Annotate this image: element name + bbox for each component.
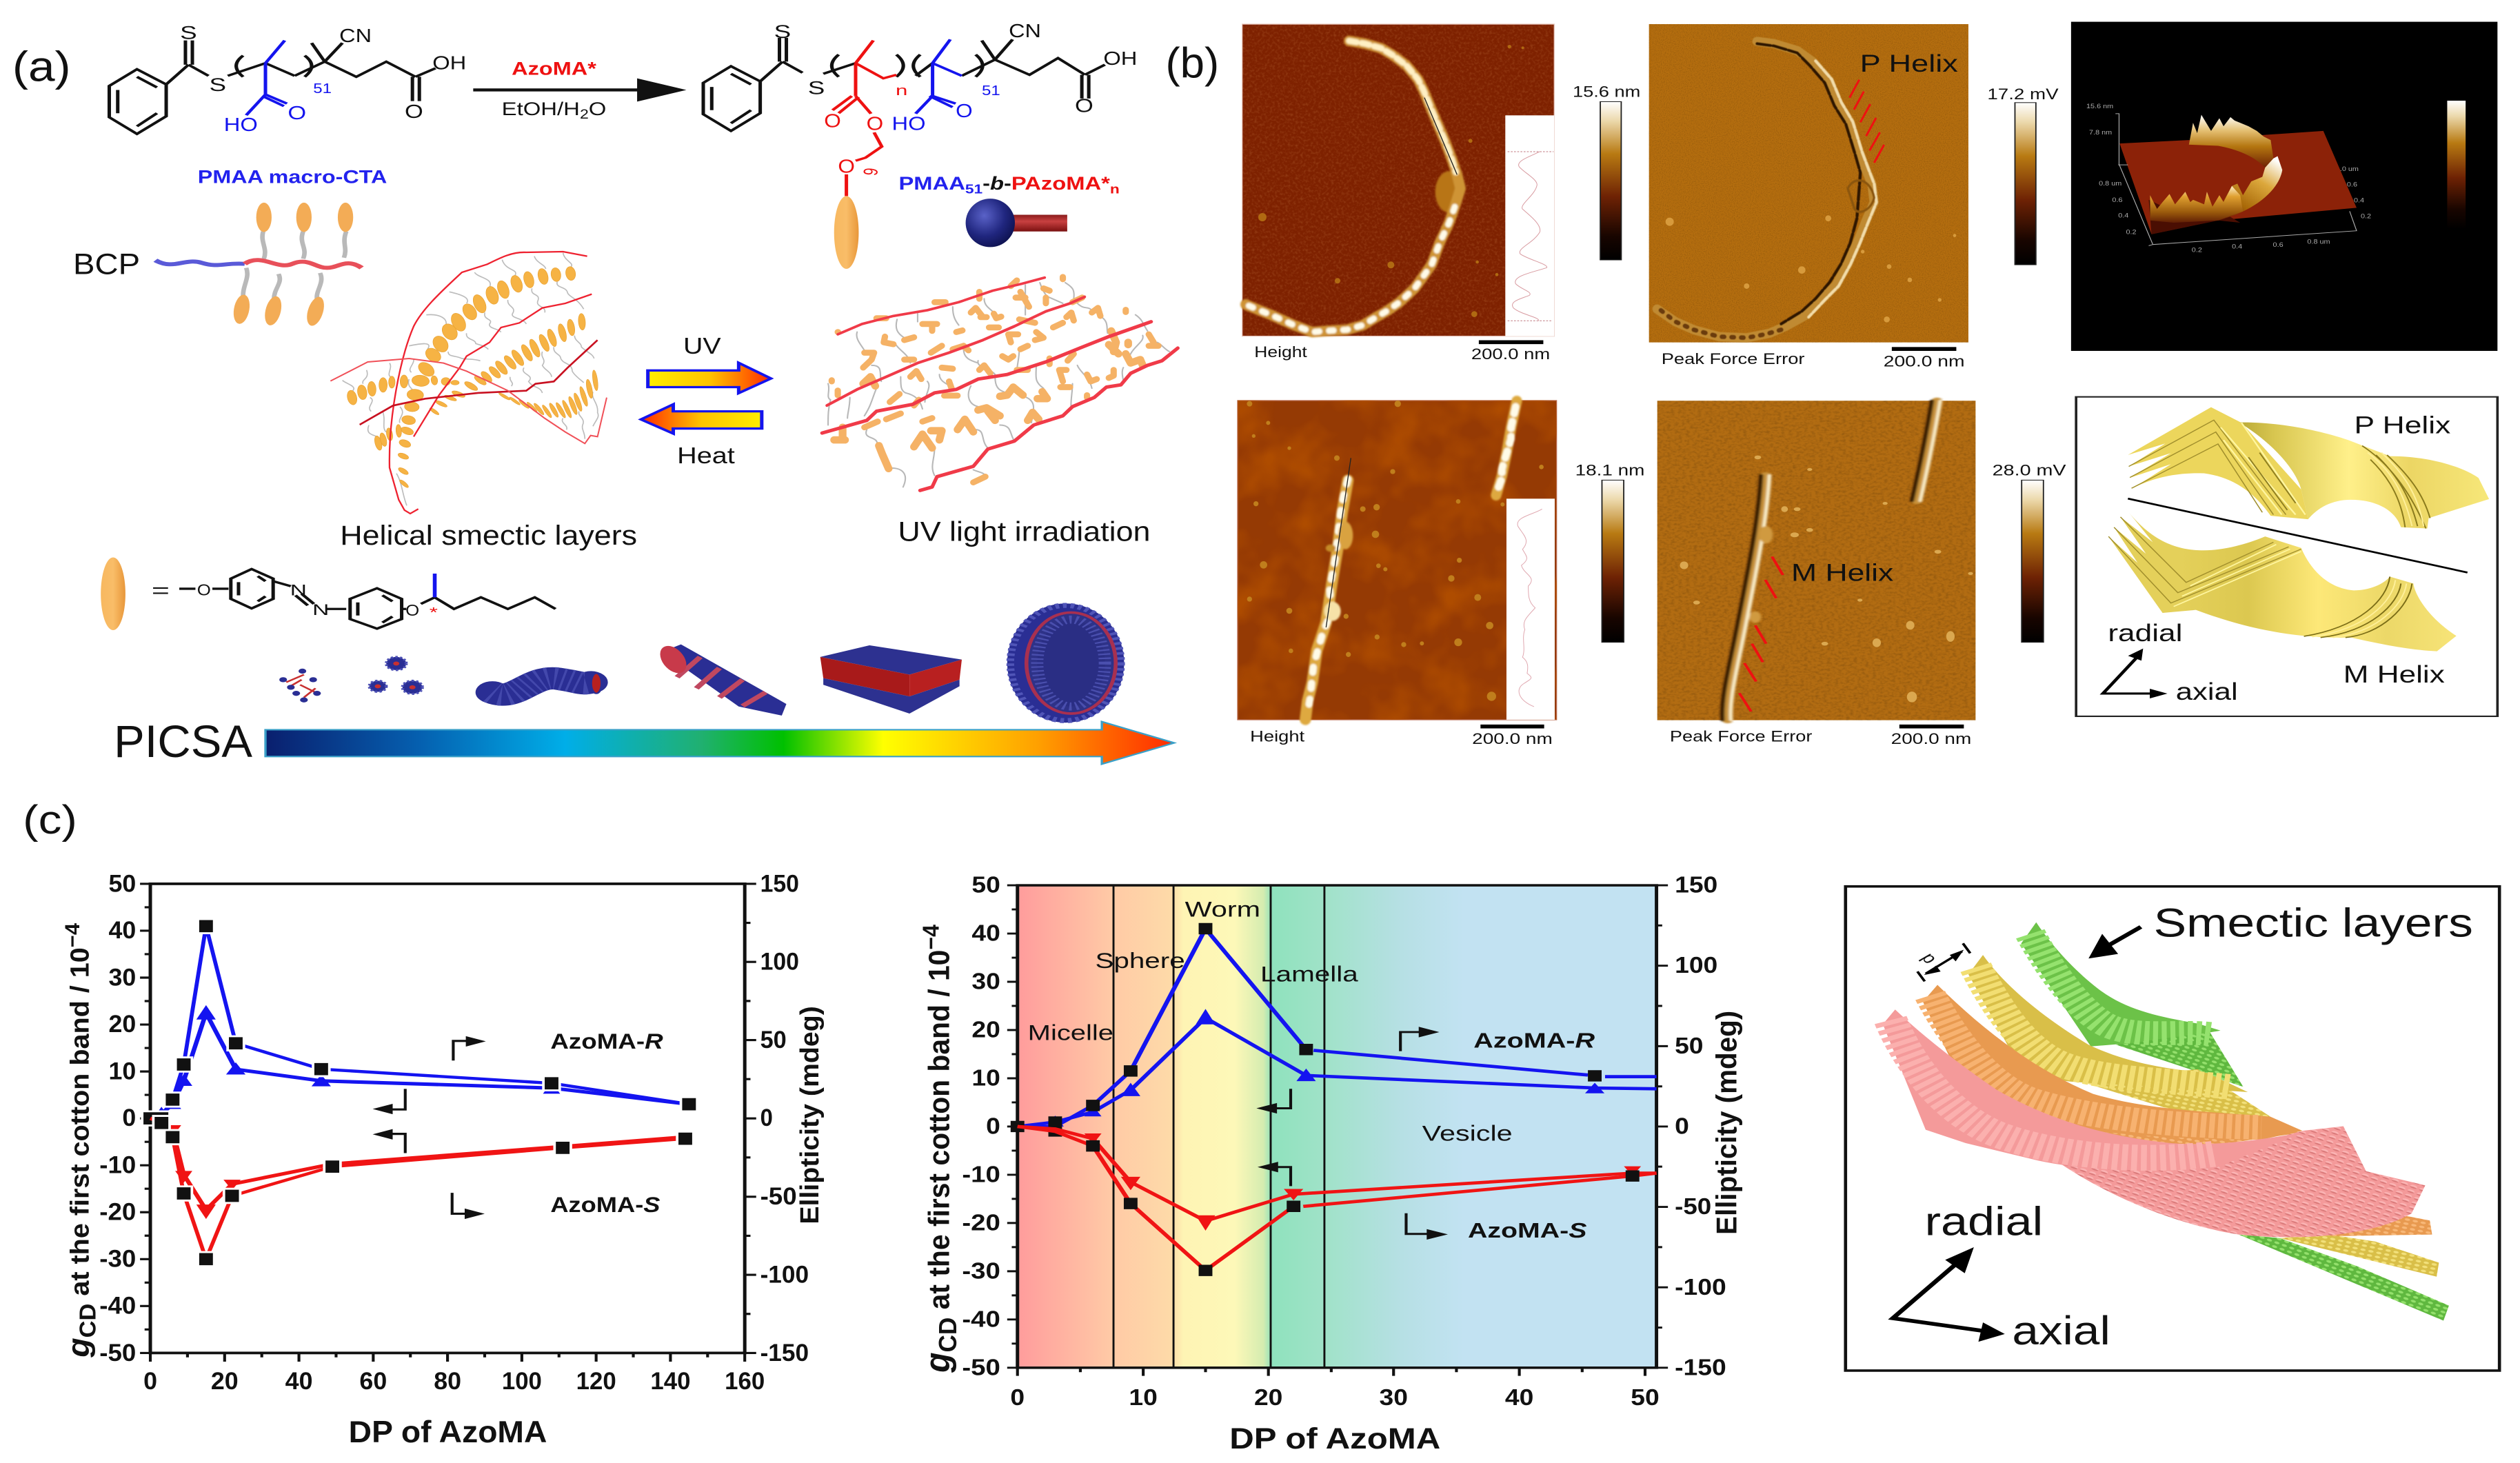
colour bar 17.2 mV: [1987, 85, 2059, 265]
y axis title left: −4: [919, 925, 944, 950]
region boundaries: [1113, 885, 1324, 1368]
arrow: UV: [648, 363, 771, 393]
x axis tick labels: 160: [725, 1367, 765, 1395]
label: Smectic layers with arrow: [2088, 901, 2473, 958]
morphology labels: Vesicle: [1422, 1122, 1513, 1146]
chemical structure: PMAA macro-CTA: 51: [313, 80, 332, 97]
spacing marker d: d: [1916, 951, 1939, 967]
x axis tick labels: 50: [1631, 1384, 1660, 1410]
text: block copolymer name: PMAA: [898, 174, 965, 194]
panel label c: (c): [23, 798, 77, 843]
chemical structure: PMAA macro-CTA: OH: [432, 52, 466, 74]
ribbon: P helix: [2128, 407, 2489, 528]
x axis tick labels: 80: [434, 1367, 461, 1395]
right axis tick labels: -50: [760, 1182, 797, 1210]
y axis title left: at the first cotton band / 10: [65, 947, 94, 1304]
text: Heat: Heat: [677, 443, 735, 469]
right axis tick labels: 50: [760, 1026, 787, 1053]
morphology labels: Micelle: [1028, 1021, 1113, 1045]
x axis tick labels: 20: [211, 1367, 239, 1395]
reaction arrow with reagents: O: [589, 99, 606, 119]
ribbon: M helix: [2108, 498, 2468, 652]
smectic layer: yellow: [1968, 955, 2439, 1277]
chemical structure: PMAA macro-CTA: O: [405, 101, 423, 122]
x axis tick labels: 0: [1010, 1384, 1025, 1410]
x axis title: DP of AzoMA: [1229, 1422, 1440, 1455]
panel label a: (a): [12, 42, 71, 90]
left axis tick labels: -20: [962, 1210, 1000, 1235]
right axis tick labels: -100: [1675, 1275, 1726, 1300]
left axis tick labels: -50: [99, 1339, 136, 1366]
data: AzoMA-R series: [143, 920, 698, 1124]
right axis tick labels: 100: [760, 948, 799, 975]
y axis title left: CD: [934, 1318, 962, 1353]
chemical structure: PMAA-b-PAzoMA block copolymer: O: [1075, 95, 1093, 117]
icon: spheres: [370, 657, 423, 694]
right axis tick labels: 150: [1675, 872, 1717, 898]
reaction arrow with reagents: EtOH/H: [502, 99, 600, 119]
x axis tick labels: 40: [285, 1367, 312, 1395]
chemical structure: PMAA-b-PAzoMA block copolymer: CN: [1009, 20, 1041, 41]
left axis tick labels: 20: [971, 1017, 1000, 1042]
data: AzoMA-S series: [1018, 1127, 1657, 1276]
morphology background bands: [1018, 885, 1657, 1368]
left axis tick labels: -50: [962, 1355, 1000, 1380]
icon: mesogen legend ellipsoid: [101, 557, 125, 630]
chemical structure: PMAA-b-PAzoMA block copolymer: n: [896, 82, 907, 98]
colour bar 17.2 mV: 17.2 mV: [1987, 85, 2059, 103]
3D AFM surface: 0.4: [2232, 243, 2243, 250]
x axis tick labels: 100: [502, 1367, 542, 1395]
axis arrows with labels: axial: [2012, 1309, 2110, 1353]
axes and ticks: [140, 884, 756, 1362]
chemical structure: azobenzene mesogen: N: [312, 602, 329, 618]
label: PICSA: PICSA: [114, 716, 252, 767]
y axis title left: CD: [75, 1304, 101, 1338]
series label: AzoMA-R: AzoMA-R: [550, 1029, 663, 1053]
panel a: synthesis and self-assembly: [12, 20, 1178, 767]
icon: sphere-rod block copolymer: [966, 199, 1067, 247]
x axis tick labels: 20: [1254, 1384, 1282, 1410]
chemical structure: azobenzene mesogen: N: [290, 582, 307, 599]
text: PMAA macro-CTA: PMAA macro-CTA: [198, 166, 387, 188]
axis arrows with labels: radial: [2108, 619, 2182, 647]
label: Smectic layers with arrow: Smectic layers: [2154, 901, 2473, 946]
label: Height: Height: [1250, 727, 1304, 745]
left axis tick labels: [962, 872, 1000, 1380]
axis arrows with labels: [2103, 619, 2238, 705]
x axis tick labels: [1010, 1384, 1660, 1410]
chemical structure: PMAA-b-PAzoMA block copolymer: O: [867, 113, 883, 134]
axis arrows with labels: [1893, 1200, 2110, 1353]
3D AFM image background with colour scale: [2071, 22, 2497, 351]
left axis tick labels: -30: [99, 1245, 136, 1272]
chemical structure: PMAA-b-PAzoMA block copolymer: S: [774, 22, 791, 42]
chemical structure: PMAA-b-PAzoMA block copolymer: HO: [891, 113, 926, 134]
panel label b: (b): [1165, 39, 1219, 87]
x axis tick labels: 40: [1505, 1384, 1533, 1410]
left axis tick labels: -10: [962, 1162, 1000, 1187]
chemical structure: PMAA-b-PAzoMA block copolymer: 6: [858, 167, 882, 176]
text: block copolymer name: 51: [965, 183, 982, 196]
colour bar 28.0 mV: 28.0 mV: [1993, 461, 2066, 478]
left axis tick labels: 40: [109, 916, 136, 944]
panel c: CD chart with morphology regions: [918, 872, 1743, 1455]
chemical structure: PMAA macro-CTA: CN: [339, 25, 372, 46]
text: UV: UV: [683, 334, 721, 359]
spacing marker d: [1916, 943, 1970, 981]
axis pointer arrows: [1256, 1027, 1448, 1240]
text: block copolymer name: n: [1110, 183, 1120, 196]
chemical structure: PMAA macro-CTA: HO: [224, 114, 258, 135]
icon: lamella: [820, 645, 962, 714]
chemical structure: PMAA macro-CTA: S: [180, 23, 197, 43]
left axis tick labels: 0: [986, 1113, 1000, 1139]
text: UV light irradiation: UV light irradiation: [898, 516, 1150, 547]
left axis tick labels: 40: [971, 920, 1000, 946]
y axis title left: g: [918, 1353, 957, 1373]
chemical structure: azobenzene mesogen: O: [197, 581, 211, 599]
icon: mesogen ellipsoid on side chain: [834, 196, 858, 269]
label: M Helix: M Helix: [1791, 559, 1893, 586]
chemical structure: PMAA-b-PAzoMA block copolymer: [703, 20, 1137, 196]
series label: AzoMA-S: AzoMA-S: [1468, 1218, 1587, 1242]
3D AFM surface: 0.4: [2118, 212, 2129, 219]
chemical structure: azobenzene mesogen: =: [152, 580, 170, 602]
text: helical smectic layers: Helical smectic layers: [340, 520, 637, 551]
3D AFM surface: 15.6 nm: [2086, 103, 2113, 110]
right axis tick labels: 0: [1675, 1113, 1689, 1139]
AFM peak force error image P helix: [1649, 24, 1968, 343]
chemical structure: PMAA macro-CTA: O: [288, 102, 306, 123]
chemical structure: PMAA-b-PAzoMA block copolymer: O: [824, 110, 841, 132]
panel c: CD chart over full DP range: [23, 798, 825, 1449]
left axis tick labels: 50: [971, 872, 1000, 898]
scale bar: 200.0 nm: [1884, 352, 1965, 370]
AFM height image M helix: [1238, 401, 1557, 720]
series label: AzoMA-S: AzoMA-S: [550, 1193, 661, 1217]
right axis tick labels: 0: [760, 1104, 773, 1131]
x axis tick labels: 10: [1129, 1384, 1158, 1410]
scale bar: [1472, 725, 1553, 747]
colour bar 18.1 nm: [1575, 461, 1644, 643]
label: Peak Force Error: Peak Force Error: [1662, 350, 1805, 367]
right axis tick labels: -50: [1675, 1193, 1711, 1219]
y axis title left: at the first cotton band / 10: [923, 950, 955, 1318]
left axis tick labels: 30: [971, 969, 1000, 994]
text: block copolymer name: b-PAzoMA*: [990, 174, 1132, 194]
left axis tick labels: [99, 870, 136, 1366]
morphology labels: Lamella: [1260, 962, 1358, 987]
chemical structure: azobenzene mesogen: *: [430, 604, 438, 620]
scale bar: 200.0 nm: [1471, 345, 1550, 363]
3D AFM surface: 0.6: [2112, 197, 2123, 204]
arrow: Heat: [641, 404, 762, 434]
3D AFM surface: 0.2: [2126, 229, 2137, 236]
panel b: AFM images and helix models: [1165, 22, 2497, 747]
line: separator: [2128, 498, 2468, 572]
x axis tick labels: 120: [576, 1367, 616, 1395]
scale bar: 200.0 nm: [1891, 729, 1971, 747]
scale bar: [1884, 347, 1965, 370]
chemical structure: azobenzene mesogen: O: [405, 602, 419, 619]
3D AFM surface: 0.4: [2354, 198, 2365, 204]
icon: tube: [655, 644, 787, 716]
3D AFM surface: 0.2: [2192, 247, 2202, 254]
chemical structure: PMAA macro-CTA: S: [210, 75, 226, 95]
reaction arrow with reagents: [473, 59, 686, 122]
smectic layer: green: [2022, 922, 2449, 1321]
series label: AzoMA-R: AzoMA-R: [1473, 1028, 1595, 1052]
chemical structure: PMAA-b-PAzoMA block copolymer: S: [808, 78, 825, 99]
left axis tick labels: -40: [962, 1306, 1000, 1332]
left axis tick labels: 10: [109, 1058, 136, 1084]
y axis title right: Ellipticity (mdeg): [795, 1006, 825, 1224]
left axis tick labels: 10: [971, 1065, 1000, 1091]
y axis title left: g: [61, 1338, 96, 1358]
icon: vesicle: [1007, 603, 1124, 723]
frame: [1846, 887, 2499, 1371]
3D AFM surface: [2086, 103, 2372, 254]
scale bar: [1891, 725, 1971, 747]
x axis tick labels: 140: [650, 1367, 690, 1395]
left axis tick labels: 50: [109, 870, 136, 897]
morphology labels: Worm: [1185, 898, 1260, 922]
morphology labels: [1028, 898, 1513, 1146]
data: AzoMA-S series: [150, 1116, 694, 1265]
3D AFM surface: 0.6: [2273, 242, 2284, 249]
right axis tick labels: -150: [760, 1339, 809, 1366]
left axis tick labels: 0: [122, 1104, 136, 1131]
x axis tick labels: 30: [1380, 1384, 1408, 1410]
axes and ticks: [1007, 885, 1668, 1376]
colour bar 28.0 mV: [1993, 461, 2066, 643]
y axis title right: Ellipticity (mdeg): [1711, 1011, 1743, 1235]
panel c: smectic layer model: [1846, 887, 2499, 1371]
left axis tick labels: -10: [99, 1151, 136, 1178]
text: block copolymer name: -: [982, 174, 990, 194]
chemical structure: PMAA macro-CTA: [109, 23, 466, 135]
smectic layer: pink: [1883, 1009, 2426, 1237]
scale bar: 200.0 nm: [1472, 729, 1553, 747]
chemical structure: PMAA-b-PAzoMA block copolymer: OH: [1103, 48, 1137, 69]
chemical structure: PMAA-b-PAzoMA block copolymer: O: [956, 100, 973, 121]
reaction arrow with reagents: AzoMA*: [512, 59, 597, 79]
reaction arrow with reagents: 2: [580, 108, 589, 122]
x axis tick labels: [143, 1367, 765, 1395]
3D AFM surface: 0.8 um: [2099, 181, 2121, 188]
x axis tick labels: 0: [143, 1367, 157, 1395]
right axis tick labels: [760, 870, 809, 1366]
morphology labels: Sphere: [1095, 949, 1185, 973]
scale bar: [1471, 341, 1550, 363]
AFM peak force error image M helix: [1657, 401, 1975, 720]
label: P Helix: P Helix: [2355, 411, 2450, 438]
chemical structure: PMAA-b-PAzoMA block copolymer: O: [838, 156, 855, 177]
right axis tick labels: 50: [1675, 1033, 1704, 1058]
y axis title left: −4: [61, 923, 84, 947]
3D AFM surface: 0.8 um: [2307, 239, 2330, 245]
left axis tick labels: 30: [109, 964, 136, 991]
left axis tick labels: -30: [962, 1258, 1000, 1284]
axis arrows with labels: axial: [2176, 678, 2238, 705]
x axis tick labels: 60: [359, 1367, 387, 1395]
colour bar 15.6 nm: 15.6 nm: [1573, 83, 1640, 100]
left axis tick labels: 20: [109, 1010, 136, 1038]
right axis tick labels: -100: [760, 1261, 809, 1288]
chemical structure: azobenzene mesogen: [152, 569, 556, 629]
left axis tick labels: -20: [99, 1198, 136, 1225]
icon: worm: [492, 673, 602, 694]
smectic layer: orange: [1923, 985, 2432, 1236]
arrow: PICSA gradient: [265, 722, 1174, 764]
icon: micelle: [279, 669, 321, 703]
box: helix model frame and labels: [2076, 397, 2497, 716]
label: P Helix: P Helix: [1860, 50, 1958, 77]
left axis tick labels: -40: [99, 1292, 136, 1319]
illustration: block copolymer chain: [155, 203, 362, 327]
chemical structure: PMAA-b-PAzoMA block copolymer: 51: [982, 82, 1000, 98]
illustration: helical smectic layers: [330, 252, 607, 514]
colour bar 15.6 nm: [1573, 83, 1640, 260]
label: Height: Height: [1254, 343, 1307, 361]
x axis title: DP of AzoMA: [349, 1415, 547, 1449]
colour bar 18.1 nm: 18.1 nm: [1575, 461, 1644, 478]
illustration: UV irradiated disordered layers: [822, 277, 1178, 490]
AFM height image P helix: [1242, 24, 1554, 336]
right axis tick labels: 150: [760, 870, 799, 897]
right axis tick labels: 100: [1675, 953, 1717, 978]
right axis tick labels: [1675, 872, 1726, 1380]
3D AFM surface: 0.6: [2347, 181, 2357, 188]
3D AFM surface: 7.8 nm: [2089, 130, 2112, 137]
3D AFM surface: .0 um: [2340, 166, 2359, 173]
axis arrows with labels: radial: [1925, 1200, 2043, 1244]
right axis tick labels: -150: [1675, 1355, 1726, 1380]
axis pointer arrows: [373, 1036, 486, 1219]
label: BCP: BCP: [73, 247, 140, 281]
data: AzoMA-R series: [1011, 923, 1657, 1137]
label: M Helix: M Helix: [2343, 660, 2445, 688]
3D AFM surface: 0.2: [2361, 213, 2372, 220]
label: Peak Force Error: Peak Force Error: [1670, 727, 1813, 745]
